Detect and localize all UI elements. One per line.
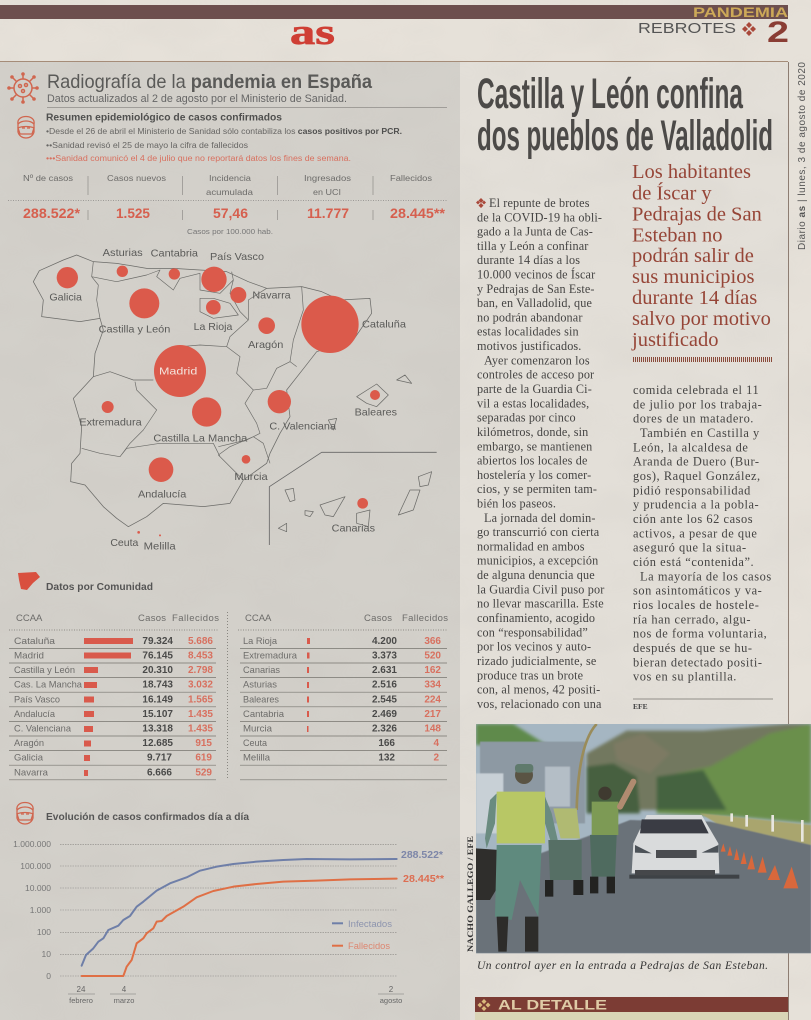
table: left: 13.318: [142, 724, 173, 734]
stats row: 288.522*: [23, 206, 81, 221]
body text column 1: estas localidades sin: [477, 325, 579, 339]
table: left: 8.453: [188, 650, 213, 662]
table: left: País Vasco: [14, 694, 60, 705]
table: right: Fallecidos: [402, 613, 448, 624]
table: right: [238, 613, 448, 780]
table: right: 162: [424, 665, 441, 676]
body text column 1: parte de la Guardia Ci-: [477, 382, 592, 396]
table: left: 79.324: [142, 636, 173, 647]
table: right: La Rioja: [243, 636, 278, 647]
line chart: 100.000: [20, 861, 51, 871]
table: right: 2.326: [372, 724, 397, 734]
table: right: 2.631: [372, 665, 397, 676]
table: left: Castilla y León: [14, 665, 75, 676]
stats row: [8, 173, 448, 236]
body text column 1: abiertos los locales de: [477, 454, 588, 468]
table: right: 4.200: [372, 636, 397, 647]
table: left: Galicia: [14, 753, 44, 764]
photo credit: NACHO GALLEGO / EFE: [466, 836, 475, 952]
table: right: Extremadura: [243, 650, 298, 662]
headline: [477, 70, 773, 160]
logo: as: as: [290, 13, 335, 52]
band: al detalle: AL DETALLE: [498, 998, 607, 1012]
icon: red map of Spain: [18, 572, 40, 590]
table: left: 5.686: [188, 636, 213, 647]
map of Spain: C. Valenciana: [269, 421, 336, 432]
line chart: Fallecidos: [348, 941, 391, 951]
subhead: salvo por motivo: [632, 308, 771, 330]
line chart: Infectados: [348, 919, 393, 929]
photo: road checkpoint: [476, 724, 811, 953]
stats row: 57,46: [213, 206, 248, 221]
table: right: Ceuta: [243, 738, 268, 749]
table: left: Aragón: [14, 738, 44, 749]
table: left: Cas. La Mancha: [14, 680, 83, 691]
table: left: 76.145: [142, 650, 173, 662]
body text column 1: con “responsabilidad”: [477, 625, 588, 639]
cones: [721, 843, 798, 888]
table: left: 9.717: [147, 753, 172, 764]
line chart: 4: [122, 985, 127, 994]
table: left: 18.743: [142, 680, 173, 691]
caption: Un control ayer en la entrada a Pedrajas de San Esteban.: [477, 960, 768, 972]
table: left: CCAA: [16, 613, 43, 624]
table: right: 132: [378, 753, 395, 764]
summary notes: ••Sanidad revisó el 25 de mayo la cifra de fallecidos: [46, 141, 248, 150]
line chart: 28.445**: [403, 874, 444, 885]
table: left: 1.435: [188, 709, 213, 720]
body text column 1: por los vecinos y auto-: [477, 640, 591, 654]
map of Spain: Melilla: [144, 541, 176, 552]
body text column 1: rizado judicialmente, se: [477, 654, 596, 668]
body text column 1: 10.000 vecinos de Íscar: [477, 268, 595, 282]
table: left: 619: [195, 753, 212, 764]
body text column 2: gos), Raquel González,: [633, 469, 761, 483]
body text column 2: dores de un matadero.: [633, 412, 754, 426]
body text column 2: ría han cerrado, algu-: [633, 612, 751, 626]
icon: mask face: [18, 116, 34, 138]
body text column 1: hostelería y los comer-: [477, 468, 591, 482]
line chart: 288.522*: [401, 850, 443, 861]
table: right: 2.469: [372, 709, 397, 720]
table: left: Fallecidos: [172, 613, 219, 624]
summary notes: •••Sanidad comunicó el 4 de julio que no reportará datos los fines de semana.: [46, 154, 351, 163]
map of Spain: Canarias: [332, 524, 375, 535]
map of Spain: País Vasco: [210, 252, 264, 263]
body text column 1: kilómetros, donde, sin: [477, 425, 588, 439]
table: left: Casos: [138, 613, 166, 624]
line chart: 1.000.000: [13, 839, 51, 849]
map of Spain: Asturias: [103, 248, 143, 259]
table: right: Asturias: [243, 680, 277, 691]
top band: [0, 5, 788, 20]
stats row: 11.777: [307, 206, 349, 221]
body text column 1: de la COVID-19 ha obli-: [477, 210, 602, 224]
body text column 1: tilla y León a confinar: [477, 239, 589, 253]
body text column 1: La jornada del domin-: [484, 511, 596, 525]
body text column 2: rios locales de hostele-: [633, 598, 759, 612]
body text column 2: nos de forma voluntaria,: [633, 627, 767, 641]
line chart: 0: [46, 971, 51, 981]
stats row: Nº de casos: [23, 173, 73, 183]
stats row: acumulada: [206, 187, 253, 197]
body text column 2: ción ante los 62 casos: [633, 512, 753, 526]
body text column 1: produce tras un brote: [477, 668, 583, 682]
map of Spain: Madrid: [159, 366, 198, 377]
table: left: Andalucía: [14, 709, 56, 720]
stats row: 28.445**: [390, 206, 446, 221]
line chart: 1.000: [30, 905, 51, 915]
table: left: 915: [195, 738, 212, 749]
map of Spain: Castilla y León: [99, 325, 171, 336]
guards: [476, 764, 633, 952]
body text column 1: El repunte de brotes: [489, 196, 590, 210]
body text column 2: vos en su plantilla.: [633, 670, 737, 684]
map of Spain: Extremadura: [79, 418, 142, 429]
body text column 1: motivos justificados.: [477, 339, 582, 353]
line: infected: [82, 859, 397, 966]
stats row: en UCI: [313, 187, 341, 197]
table: left: 6.666: [147, 767, 172, 778]
map of Spain: Aragón: [248, 340, 284, 351]
line chart: marzo: [114, 996, 134, 1005]
section: rebrotes 2: REBROTES: [638, 21, 736, 37]
table: right: 4: [433, 738, 439, 749]
body text column 1: durante 14 días a los: [477, 253, 580, 267]
body text column 2: También en Castilla y: [640, 426, 760, 440]
body text column 1: de alguna denuncia que: [477, 568, 595, 582]
body text column 1: vos, relacionado con una: [477, 697, 602, 711]
vertical folio: Diario as | lunes, 3 de agosto de 2020: [797, 62, 808, 250]
subhead: de Íscar y: [632, 182, 712, 204]
band: al detalle: [475, 997, 788, 1020]
table: left: 1.565: [188, 694, 213, 705]
body text column 1: gado a la Junta de Cas-: [477, 225, 593, 239]
table: right: 2.545: [372, 694, 397, 705]
line chart: agosto: [380, 996, 402, 1005]
summary notes: •Desde el 26 de abril el Ministerio de Sanidad sólo contabiliza los casos positivos por PCR.: [46, 127, 402, 136]
table: right: Melilla: [243, 753, 271, 764]
table: left: 529: [195, 767, 212, 778]
panel: article: [460, 62, 788, 1020]
body text column 1: confinamiento, acogido: [477, 611, 595, 625]
summary notes: [46, 112, 402, 163]
map of Spain: [33, 248, 437, 552]
map of Spain: Cataluña: [362, 319, 406, 330]
body text column 2: y prudencia a la pobla-: [633, 498, 759, 512]
table: right: 2.516: [372, 680, 397, 691]
line chart: 10: [42, 949, 51, 959]
table: left: 16.149: [142, 694, 173, 705]
table: left: 2.798: [188, 665, 213, 676]
section: rebrotes 2: 2: [767, 16, 789, 49]
body text column 1: no llevar mascarilla. Este: [477, 597, 604, 611]
subhead: durante 14 días: [632, 287, 757, 309]
icon: diamond bullet: [476, 198, 486, 208]
body text column 1: embargo, se mantienen: [477, 439, 592, 453]
body text column 2: Aranda de Duero (Bur-: [633, 455, 760, 469]
icon: mask face chart: [17, 802, 33, 824]
map of Spain: Murcia: [234, 472, 268, 483]
table: right: 2: [433, 753, 439, 764]
stats row: Fallecidos: [390, 173, 432, 183]
body text column 1: cios, y se permiten tam-: [477, 482, 597, 496]
panel: infographic background: [0, 62, 460, 1020]
line chart: 24: [77, 985, 86, 994]
table: left: Navarra: [14, 767, 49, 778]
heading: chart: Evolución de casos confirmados día a día: [46, 812, 249, 823]
map of Spain: Cantabria: [151, 249, 198, 260]
table: right: Canarias: [243, 665, 280, 676]
line chart: 10.000: [25, 883, 51, 893]
stats row: Casos nuevos: [107, 173, 166, 183]
body text column 2: aseguró que la situa-: [633, 541, 747, 555]
table: left: 3.032: [188, 680, 213, 691]
subhead: sus municipios: [632, 266, 754, 288]
stats row: Ingresados: [304, 173, 351, 183]
icon: virus: [7, 72, 39, 104]
body text column 1: y Pedrajas de San Este-: [477, 282, 595, 296]
map of Spain: Castilla La Mancha: [153, 434, 248, 445]
table: right: Casos: [364, 613, 392, 624]
map of Spain: Navarra: [252, 290, 291, 301]
body text column 1: municipios, a excepción: [477, 554, 598, 568]
table: right: CCAA: [245, 613, 272, 624]
body text column 2: después de que se hu-: [633, 641, 753, 655]
line chart: febrero: [69, 996, 93, 1005]
body text column 1: bién los paseos.: [477, 496, 556, 510]
section: rebrotes 2: [638, 16, 789, 49]
subhead: Los habitantes: [632, 161, 751, 183]
map of Spain: Galicia: [49, 293, 82, 304]
table: left: 1.435: [188, 724, 213, 734]
body text column 1: con, al menos, 42 positi-: [477, 683, 600, 697]
body text column 2: pidió responsabilidad: [633, 483, 751, 497]
map of Spain: Ceuta: [110, 538, 139, 549]
body text column 2: bieran detectado positi-: [633, 655, 762, 669]
subhead: podrán salir de: [632, 245, 754, 267]
table: right: Murcia: [243, 724, 273, 734]
table: right: 224: [424, 694, 441, 705]
body text column 1: ban, en Valladolid, que: [477, 296, 592, 310]
body text column 2: son asintomáticos y va-: [633, 584, 762, 598]
body text column 1: vil a estas localidades,: [477, 396, 589, 410]
table: left: 20.310: [142, 665, 173, 676]
subhead: Esteban no: [632, 224, 723, 246]
body text column 2: León, la alcaldesa de: [633, 440, 748, 454]
table: right: 217: [424, 709, 441, 720]
table: left: Madrid: [14, 650, 44, 662]
body text column 2: ción está “contenida”.: [633, 555, 754, 569]
summary notes: Resumen epidemiológico de casos confirmados: [46, 112, 283, 124]
map of Spain: Andalucía: [138, 489, 187, 500]
subhead: Pedrajas de San: [632, 204, 762, 226]
table: left: 15.107: [142, 709, 173, 720]
body text column 2: de julio por los trabaja-: [633, 397, 762, 411]
stats row: 1.525: [116, 206, 150, 221]
table: right: 3.373: [372, 650, 397, 662]
body text column 1: separadas por cinco: [477, 411, 576, 425]
table: right: Baleares: [243, 694, 279, 705]
table: right: 148: [424, 724, 441, 734]
table: left: C. Valenciana: [14, 724, 72, 734]
subhead: justificado: [631, 329, 719, 351]
line chart: [13, 839, 444, 1005]
map of Spain: La Rioja: [194, 322, 233, 333]
table: right: 520: [424, 650, 441, 662]
table: right: Cantabria: [243, 709, 285, 720]
body text column 1: Ayer comenzaron los: [484, 353, 590, 367]
table: right: 334: [424, 680, 441, 691]
line chart: 2: [389, 985, 394, 994]
stats row: Casos por 100.000 hab.: [187, 227, 273, 236]
table: left: Cataluña: [14, 636, 56, 647]
line chart: 100: [37, 927, 51, 937]
body text column 2: activos, a pesar de que: [633, 526, 757, 540]
body text column 1: normalidad en ambos: [477, 539, 585, 553]
stats row: Incidencia: [209, 173, 251, 183]
top band: PANDEMIA: [693, 5, 788, 20]
body text column 1: la Guardia Civil puso por: [477, 582, 604, 596]
body text column 1: controles de acceso por: [477, 368, 594, 382]
byline: EFE: [633, 702, 648, 711]
body text column 1: no podrán abandonar: [477, 310, 583, 324]
table: left: [9, 613, 219, 780]
subtitle: Datos actualizados al 2 de agosto por el Ministerio de Sanidad.: [47, 93, 347, 105]
table: left: 12.685: [142, 738, 173, 749]
map of Spain: Baleares: [355, 407, 397, 418]
table: right: 366: [424, 636, 441, 647]
body text column 1: go transcurrió con cierta: [477, 525, 600, 539]
heading: data by community: Datos por Comunidad: [46, 582, 153, 593]
body text column 2: La mayoría de los casos: [640, 569, 772, 583]
body text column 2: comida celebrada el 11: [633, 383, 759, 397]
line: deaths: [82, 879, 397, 976]
title: Radiografía de la pandemia en España: [47, 71, 372, 93]
table: right: 166: [378, 738, 395, 749]
car: [629, 815, 739, 879]
